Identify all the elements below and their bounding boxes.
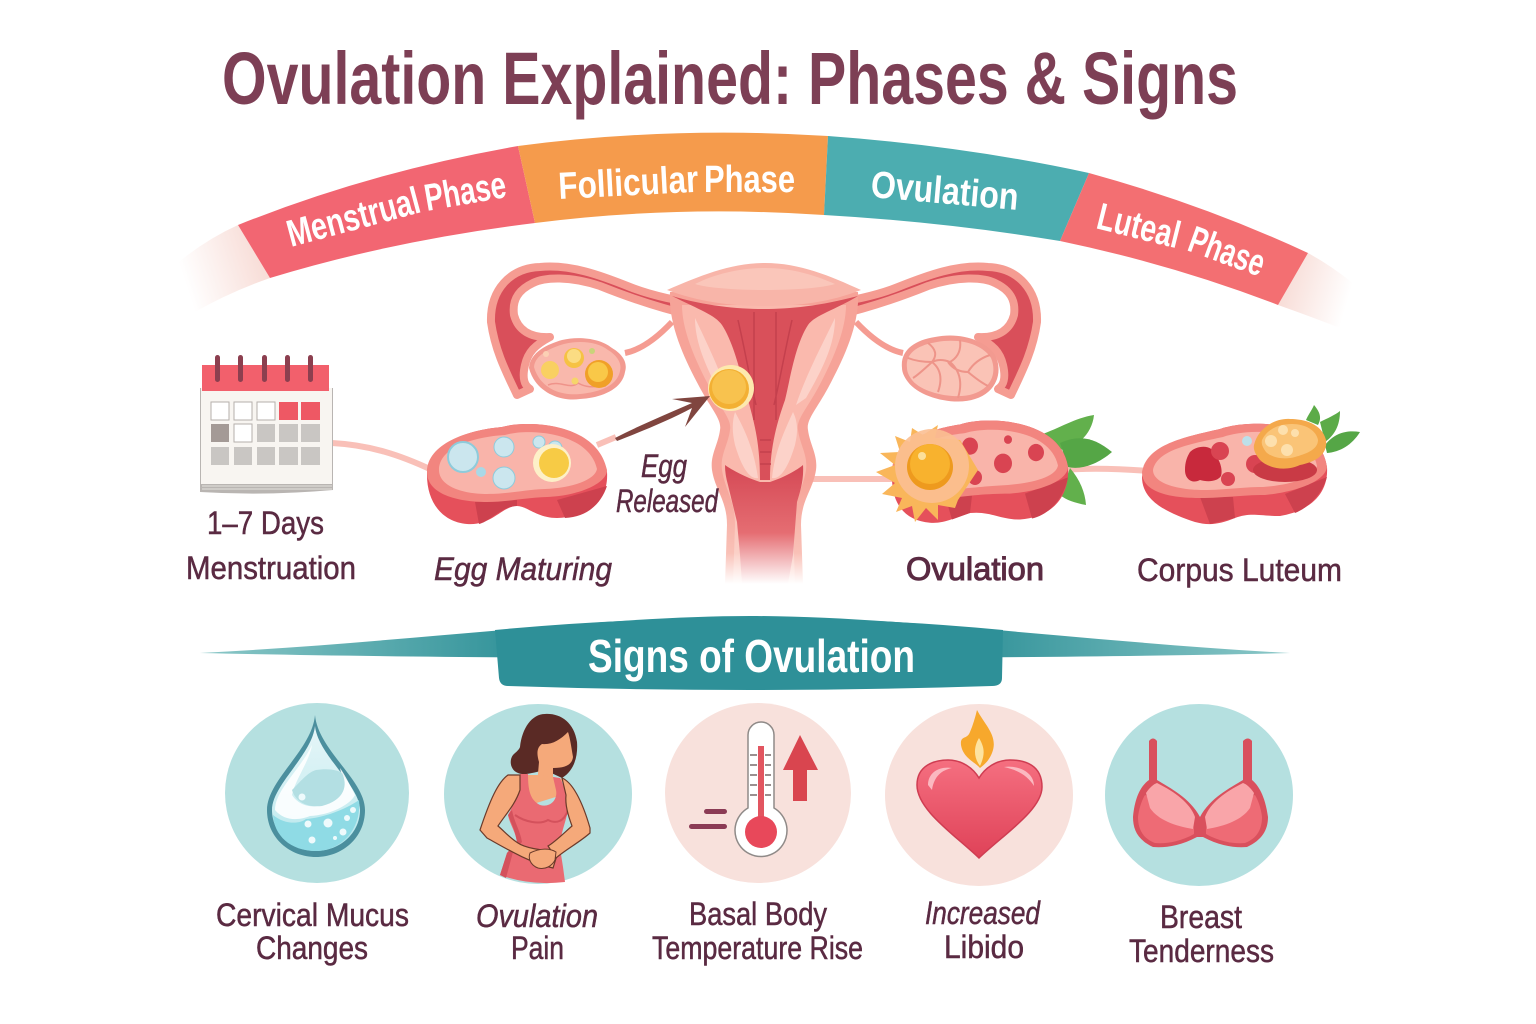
- cavity folds: [738, 312, 792, 464]
- icon: woman: [480, 714, 590, 883]
- ovary: ovulation: [892, 421, 1068, 523]
- torso skin: [520, 775, 562, 805]
- right arm: [548, 778, 590, 858]
- label: [652, 896, 863, 966]
- sign: basal body temperature: [652, 703, 863, 966]
- label: egg released: Released: [616, 483, 719, 519]
- phase: ovulation: [824, 136, 1089, 241]
- phase arc band: [175, 133, 1355, 332]
- label: egg maturing: Egg Maturing: [434, 551, 612, 587]
- uterus diagram: [491, 263, 1037, 584]
- label: 1-7 days menstruation: 1–7 Days: [207, 505, 324, 541]
- released egg: [708, 365, 754, 411]
- sign: breast tenderness: [1105, 704, 1293, 969]
- icon: arrow up: [783, 735, 818, 801]
- phase: luteal: [1060, 173, 1308, 305]
- leaves: ovulation ovary: [1040, 415, 1112, 505]
- label: ovulation: Ovulation: [906, 551, 1044, 587]
- uterine dome: [667, 263, 861, 306]
- signs banner: [200, 616, 1290, 690]
- label: 1-7 days menstruation: Menstruation: [186, 550, 356, 586]
- label: Tenderness: [1129, 933, 1274, 969]
- uterine cavity: [672, 296, 858, 480]
- label: egg released: [616, 448, 719, 519]
- phase: follicular: [518, 133, 828, 223]
- inner body: [682, 305, 846, 584]
- face and neck: [537, 732, 573, 790]
- icon: water drop: [267, 715, 365, 857]
- label: Increased: [925, 895, 1041, 931]
- phase: follicular: Phase: [704, 159, 795, 201]
- icon: flame: [961, 710, 994, 768]
- cervix lips: [733, 412, 758, 478]
- left arm: [480, 775, 558, 868]
- ovary: corpus luteum: [1142, 424, 1327, 524]
- icon: minus marks: [689, 809, 727, 829]
- left fallopian tube: [491, 267, 740, 395]
- left ovary with follicles: [529, 338, 626, 400]
- ovary: egg maturing: [427, 424, 607, 524]
- title: Ovulation Explained: Phases & Signs: [222, 37, 1238, 120]
- label: egg released: Egg: [641, 448, 687, 484]
- arrow: egg release: [615, 396, 710, 441]
- icon: heart: [917, 760, 1042, 858]
- connector lines: [332, 437, 1148, 479]
- wall highlights: [695, 318, 835, 405]
- dress: [500, 774, 568, 883]
- label: corpus luteum: Corpus Luteum: [1137, 552, 1342, 588]
- phase: menstrual: [238, 146, 535, 278]
- phase: menstrual: Phase: [421, 164, 509, 220]
- label: 1-7 days menstruation: [186, 505, 356, 586]
- sign: increased libido: [885, 704, 1073, 965]
- icon: bra: [1133, 738, 1268, 847]
- label: Temperature Rise: [652, 930, 863, 966]
- calendar icon: [200, 355, 333, 494]
- dome highlight: [695, 268, 835, 290]
- sunburst egg: [876, 425, 978, 522]
- label: [925, 895, 1041, 965]
- right fallopian tube: [788, 267, 1037, 395]
- label: Basal Body: [689, 896, 827, 932]
- corpus luteum yellow body: [1253, 419, 1326, 482]
- hands: [529, 849, 556, 869]
- label: [216, 897, 409, 966]
- label: Changes: [256, 930, 368, 966]
- phase: follicular: Follicular: [557, 159, 699, 208]
- label: Pain: [511, 930, 564, 966]
- phase: ovulation: Ovulation: [869, 164, 1020, 219]
- phase: luteal: Luteal: [1093, 196, 1184, 257]
- banner heading: Signs of Ovulation: [588, 630, 915, 682]
- label: [476, 898, 598, 966]
- right ovary with cells: [902, 336, 999, 402]
- hair: [511, 714, 577, 778]
- uterine body and canal: [670, 292, 858, 584]
- sign: cervical mucus: [216, 703, 409, 966]
- label: Libido: [944, 929, 1024, 965]
- vagina canal: [725, 465, 803, 584]
- icon: thermometer: [735, 722, 787, 857]
- label: Ovulation: [476, 898, 598, 934]
- label: Cervical Mucus: [216, 897, 409, 933]
- phase: luteal: Phase: [1183, 219, 1271, 285]
- sign: ovulation pain: [444, 704, 632, 966]
- label: [1129, 899, 1274, 969]
- leaves: corpus luteum: [1306, 405, 1360, 453]
- phase: menstrual: Menstrual: [282, 180, 425, 256]
- label: Breast: [1160, 899, 1242, 935]
